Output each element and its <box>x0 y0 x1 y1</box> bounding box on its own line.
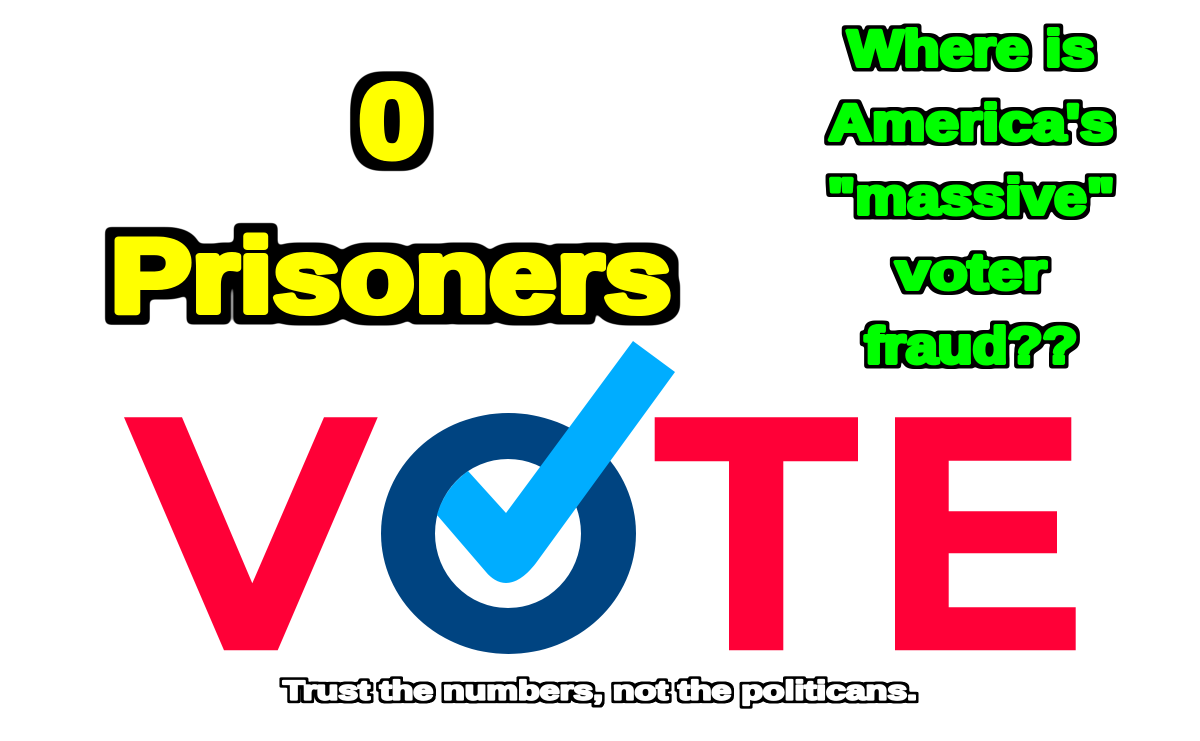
line: fraud: fraud?? <box>864 317 1078 374</box>
line: Where is: Where is <box>848 20 1094 77</box>
icon: check mark <box>437 341 675 583</box>
caption: Trust the numbers, not the politicans. <box>283 676 917 706</box>
letter V <box>124 417 378 650</box>
question: where is the voter fraud <box>828 20 1114 374</box>
heading: 0 Prisoners <box>110 64 672 334</box>
letter T <box>655 417 858 650</box>
line: massive: "massive" <box>828 168 1114 225</box>
VOTE logo <box>124 341 1076 654</box>
letter O <box>381 413 636 654</box>
line: America's: America's <box>828 94 1114 151</box>
letter E <box>895 417 1076 650</box>
line: voter: voter <box>896 243 1047 300</box>
number: 0: 0 <box>359 64 425 180</box>
word: Prisoners: Prisoners <box>110 218 672 334</box>
